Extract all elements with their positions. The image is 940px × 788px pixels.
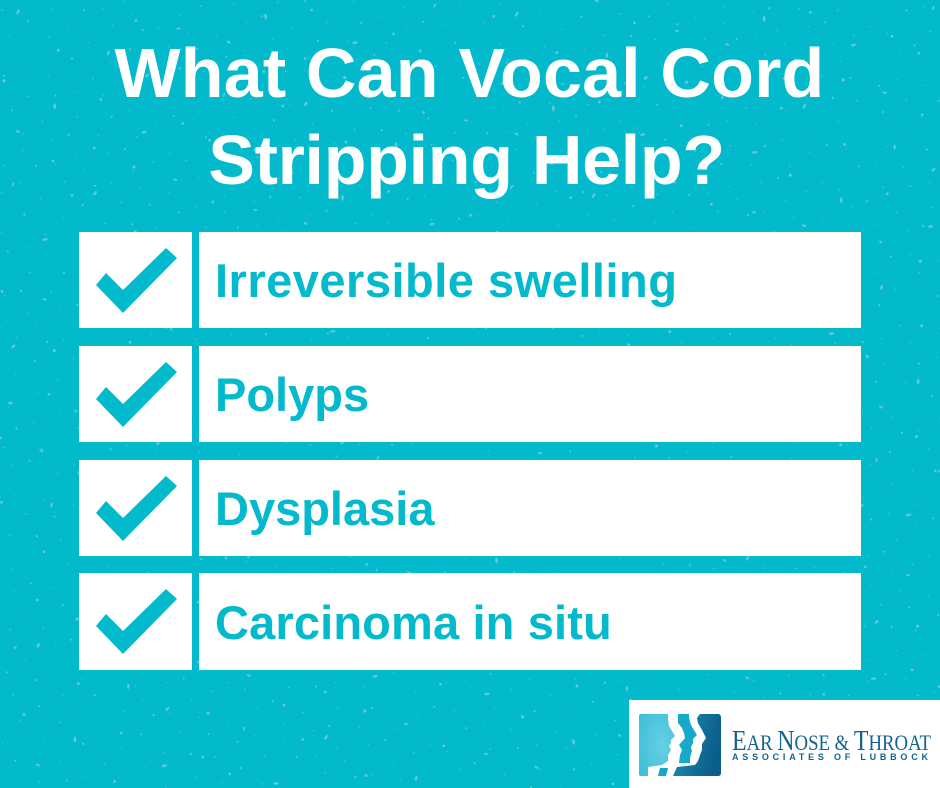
check box: [79, 346, 192, 442]
label: Polyps: [215, 368, 369, 421]
label: Irreversible swelling: [215, 254, 677, 307]
row: Irreversible swelling: [79, 232, 861, 328]
label: Carcinoma in situ: [215, 596, 612, 649]
row: Carcinoma in situ: [79, 573, 861, 670]
logo subtitle: ASSOCIATES OF LUBBOCK: [732, 752, 928, 762]
logo panel: [629, 700, 940, 788]
check box: [79, 573, 192, 670]
label box: [199, 573, 861, 670]
title: [114, 34, 824, 199]
logo name: EAR NOSE & THROAT: [732, 726, 931, 757]
icon: three face profiles: [639, 714, 721, 776]
check box: [79, 460, 192, 556]
title: What Can Vocal Cord: [115, 34, 824, 112]
check box: [79, 232, 192, 328]
label: Dysplasia: [215, 482, 434, 535]
label box: [199, 232, 861, 328]
row: Polyps: [79, 346, 861, 442]
title: Stripping Help?: [208, 121, 725, 199]
label box: [199, 460, 861, 556]
label box: [199, 346, 861, 442]
row: Dysplasia: [79, 460, 861, 556]
